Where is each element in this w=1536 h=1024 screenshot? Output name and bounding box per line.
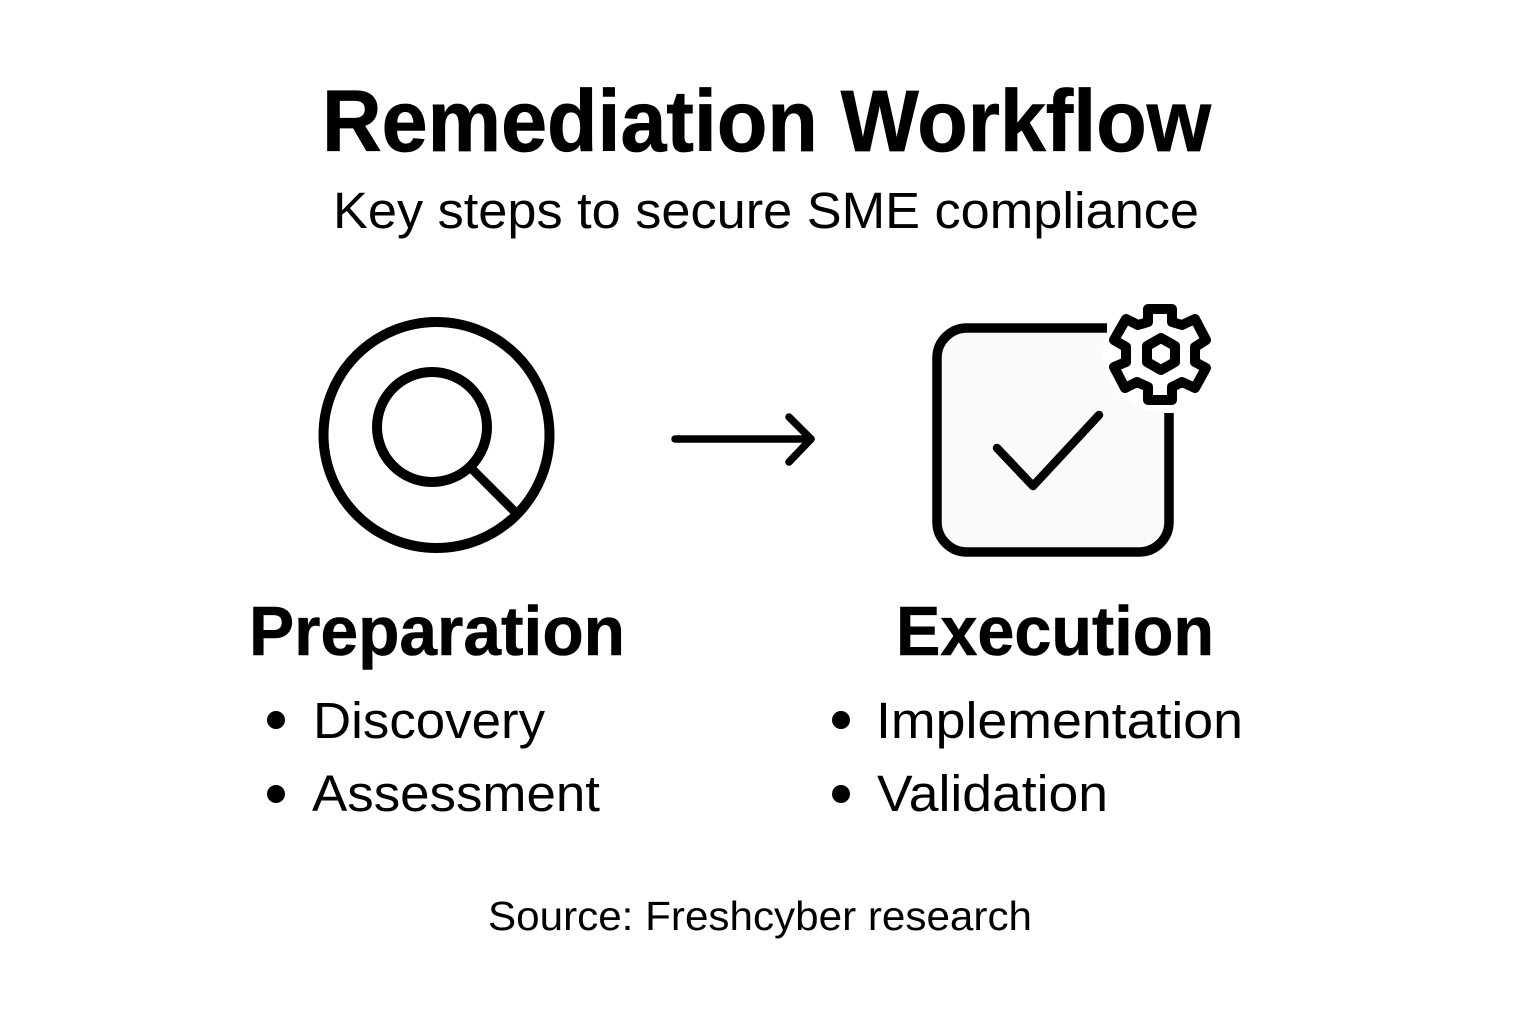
list: preparation steps: Discovery xyxy=(313,692,546,749)
icon: magnifying glass in circle xyxy=(324,322,550,548)
heading: Preparation: Preparation xyxy=(249,592,625,670)
source note: Source: Freshcyber research xyxy=(488,893,1032,939)
list: execution steps: Validation xyxy=(877,765,1108,822)
subtitle: Key steps to secure SME compliance xyxy=(333,182,1199,239)
list: preparation steps xyxy=(267,692,600,822)
title: Remediation Workflow xyxy=(322,73,1211,170)
list: execution steps xyxy=(832,692,1243,822)
icon: checkbox with gear xyxy=(937,297,1217,552)
arrow xyxy=(675,417,811,462)
list: execution steps: Implementation xyxy=(876,692,1243,749)
heading: Execution: Execution xyxy=(896,592,1214,670)
list: preparation steps: Assessment xyxy=(312,765,600,822)
